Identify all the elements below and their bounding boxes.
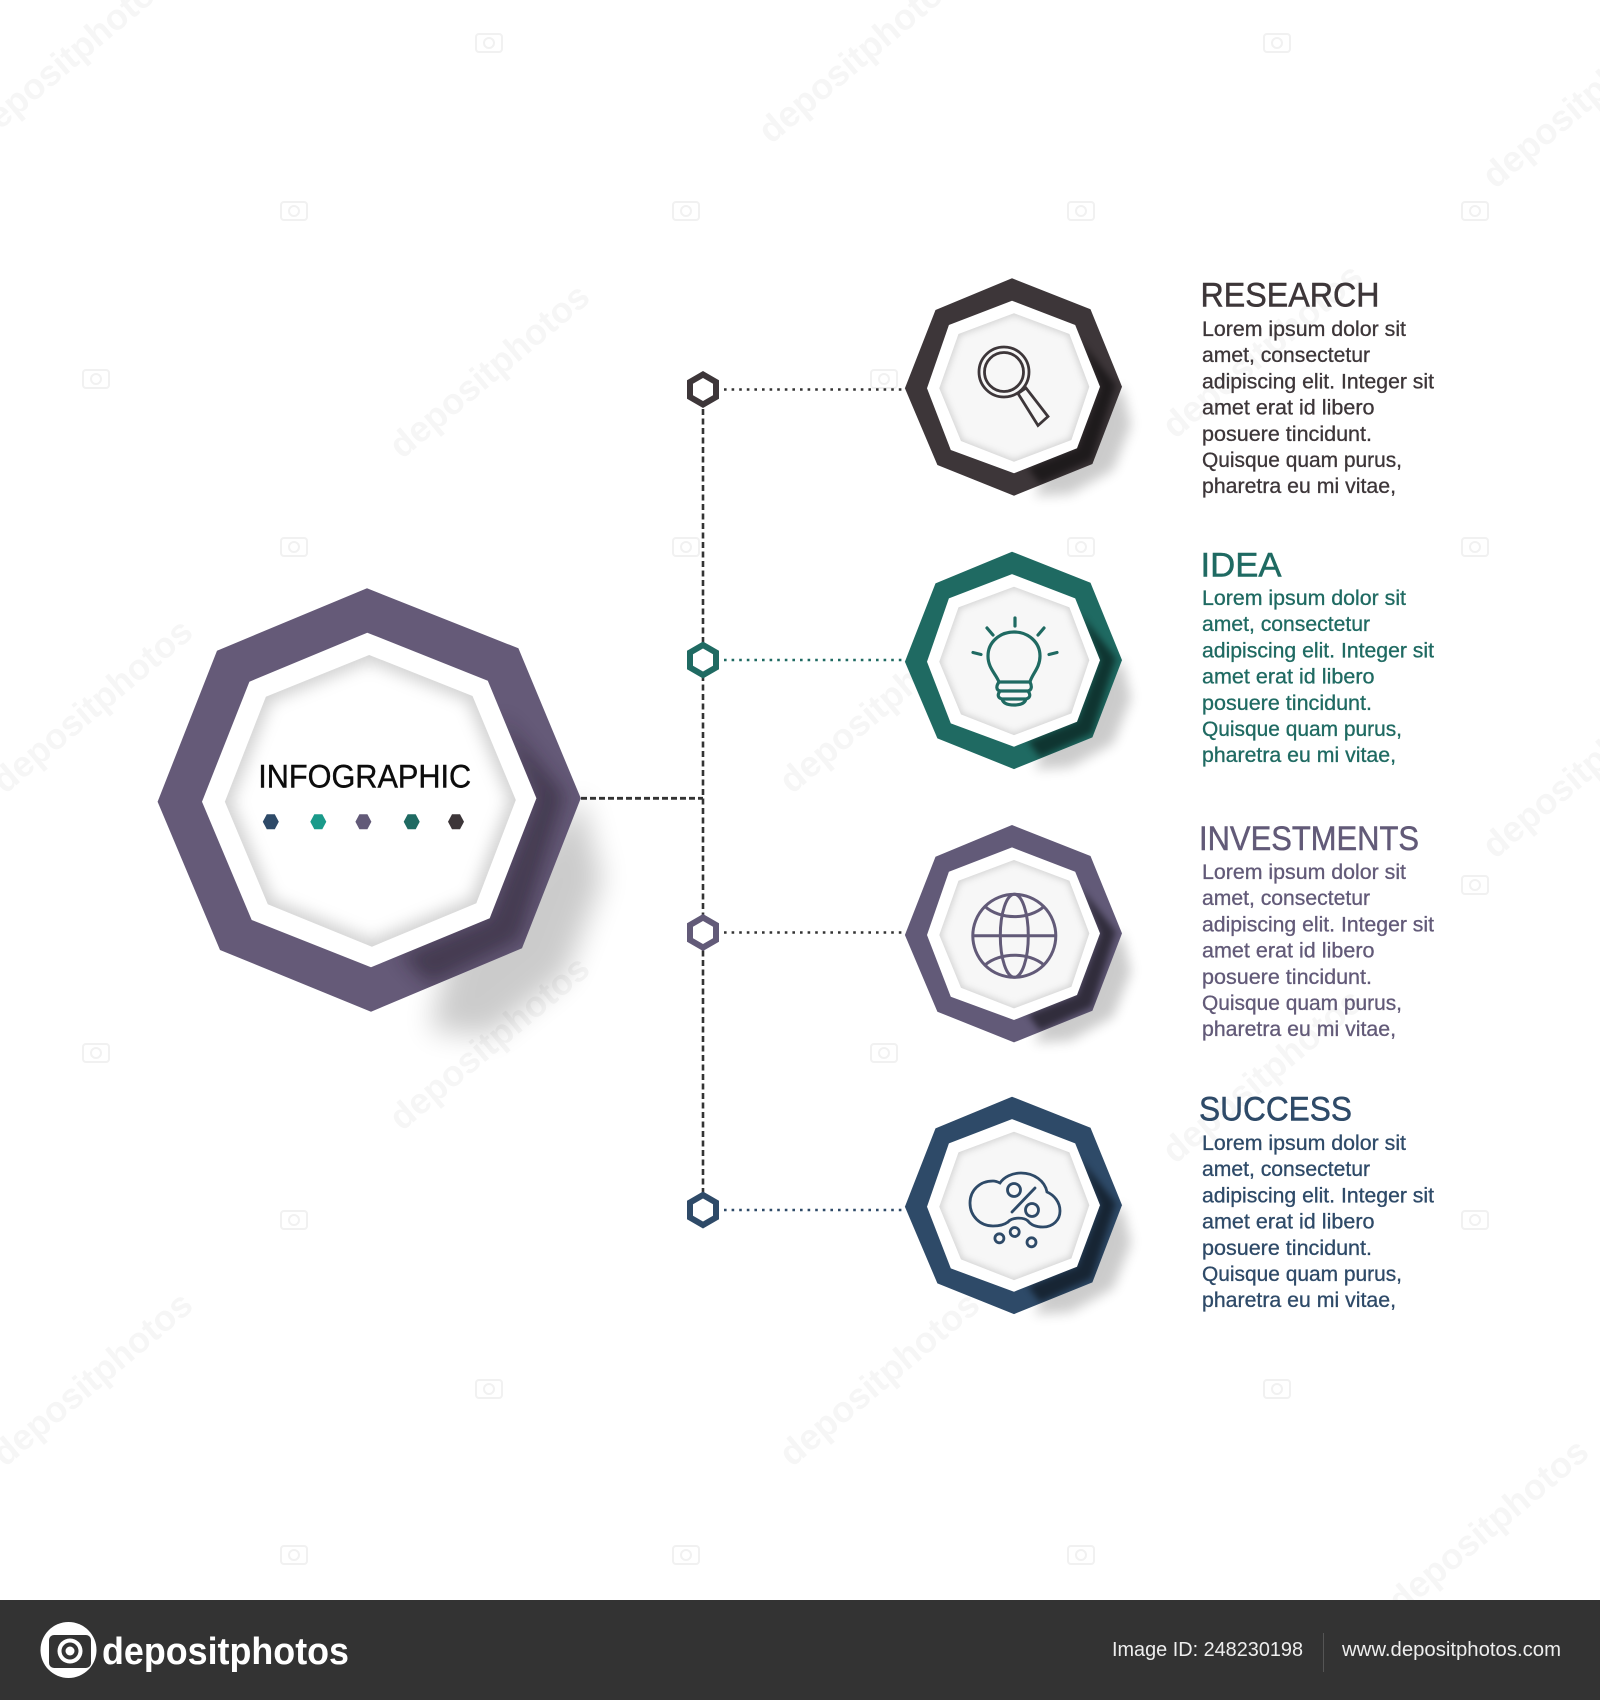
badge: research — [905, 278, 1131, 496]
badge: investments — [905, 825, 1131, 1043]
node: research — [690, 374, 716, 404]
text block: research: posuere tincidunt. — [1202, 423, 1372, 446]
heading: investments: INVESTMENTS — [1199, 820, 1419, 858]
text block: idea: pharetra eu mi vitae, — [1202, 744, 1396, 767]
text block: success: amet erat id libero — [1202, 1211, 1374, 1234]
hub colour dots — [263, 814, 464, 829]
watermark pattern: depositphotos — [1154, 255, 1370, 446]
text block: idea: amet erat id libero — [1202, 666, 1374, 689]
text block: idea: Lorem ipsum dolor sit — [1202, 587, 1406, 610]
text block: success — [1202, 1132, 1434, 1312]
icon: cloud with percent — [970, 1173, 1060, 1247]
text block: investments: pharetra eu mi vitae, — [1202, 1018, 1396, 1041]
text block: success: posuere tincidunt. — [1202, 1237, 1372, 1260]
text block: research — [1202, 318, 1434, 498]
badge: idea — [905, 552, 1131, 769]
text block: research: Quisque quam purus, — [1202, 449, 1402, 472]
watermark pattern: depositphotos — [771, 610, 987, 801]
icon: light bulb — [973, 618, 1057, 705]
website: www.depositphotos.com — [1341, 1639, 1561, 1661]
text block: investments — [1202, 861, 1434, 1041]
text block: investments: amet, consectetur — [1202, 887, 1370, 910]
node: success — [690, 1195, 716, 1225]
connector lines — [581, 390, 905, 1210]
icon: camera logo — [40, 1622, 96, 1678]
text block: research: amet erat id libero — [1202, 397, 1374, 420]
text block: success: Lorem ipsum dolor sit — [1202, 1132, 1406, 1155]
text block: success: pharetra eu mi vitae, — [1202, 1289, 1396, 1312]
text block: research: amet, consectetur — [1202, 344, 1370, 367]
watermark pattern: depositphotos — [381, 275, 597, 466]
text block: investments: amet erat id libero — [1202, 940, 1374, 963]
text block: investments: Lorem ipsum dolor sit — [1202, 861, 1406, 884]
node: investments — [690, 918, 716, 948]
badge: success — [905, 1097, 1131, 1314]
heading: research: RESEARCH — [1200, 277, 1380, 315]
central hub octagon — [158, 588, 602, 1036]
text block: success: Quisque quam purus, — [1202, 1263, 1402, 1286]
hub title: INFOGRAPHIC — [258, 758, 471, 794]
text block: research: Lorem ipsum dolor sit — [1202, 318, 1406, 341]
watermark pattern: depositphotos — [1154, 980, 1370, 1171]
text block: success: amet, consectetur — [1202, 1158, 1370, 1181]
text block: idea: posuere tincidunt. — [1202, 692, 1372, 715]
text block: research: adipiscing elit. Integer sit — [1202, 370, 1434, 393]
text block: research: pharetra eu mi vitae, — [1202, 475, 1396, 498]
image id: Image ID: 248230198 — [1112, 1639, 1303, 1661]
text block: success: adipiscing elit. Integer sit — [1202, 1184, 1434, 1207]
text block: idea: Quisque quam purus, — [1202, 718, 1402, 741]
icon: magnifier — [979, 347, 1048, 426]
heading: success: SUCCESS — [1199, 1091, 1352, 1129]
watermark pattern: depositphotos — [1380, 1430, 1596, 1621]
footer bar — [0, 1600, 1600, 1700]
text block: idea: adipiscing elit. Integer sit — [1202, 639, 1434, 662]
logo wordmark: depositphotos — [102, 1631, 349, 1673]
icon: globe — [973, 894, 1056, 977]
heading: idea: IDEA — [1200, 546, 1282, 584]
watermark pattern: depositphotos — [381, 947, 597, 1138]
text block: idea: amet, consectetur — [1202, 613, 1370, 636]
text block: investments: posuere tincidunt. — [1202, 966, 1372, 989]
node: idea — [690, 645, 716, 675]
watermark pattern: depositphotos — [771, 1283, 987, 1474]
text block: investments: adipiscing elit. Integer sit — [1202, 913, 1434, 936]
text block: investments: Quisque quam purus, — [1202, 992, 1402, 1015]
text block: idea — [1202, 587, 1434, 767]
